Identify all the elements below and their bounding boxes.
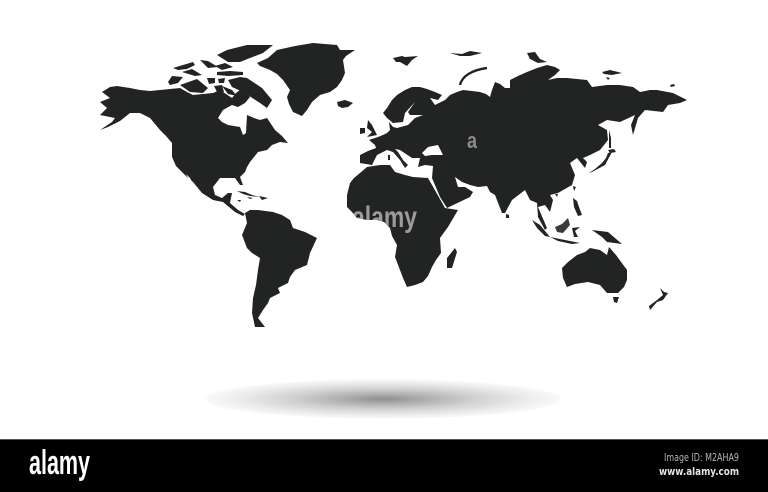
island: Iceland — [337, 100, 353, 108]
watermark: a on Asia: a — [467, 128, 478, 153]
website: www.alamy.com — [659, 465, 739, 478]
drop shadow under map — [203, 379, 563, 419]
world map — [100, 43, 687, 327]
footer bar — [0, 439, 768, 492]
footer logo: alamy — [29, 444, 90, 482]
watermark: alamy on Africa: alamy — [352, 201, 417, 234]
continent: Australia — [562, 247, 627, 293]
continent: Greenland — [257, 43, 355, 116]
continent: South America — [242, 210, 317, 327]
image id: Image ID: M2AHA9 — [664, 452, 739, 464]
arctic islands of Canada — [168, 45, 273, 108]
island: Novaya Zemlya — [460, 68, 487, 85]
inland seas — [186, 145, 443, 187]
islands — [237, 51, 675, 310]
continent: Africa — [347, 165, 458, 287]
continent: Eurasia — [360, 65, 687, 230]
continent: North America — [100, 86, 288, 216]
